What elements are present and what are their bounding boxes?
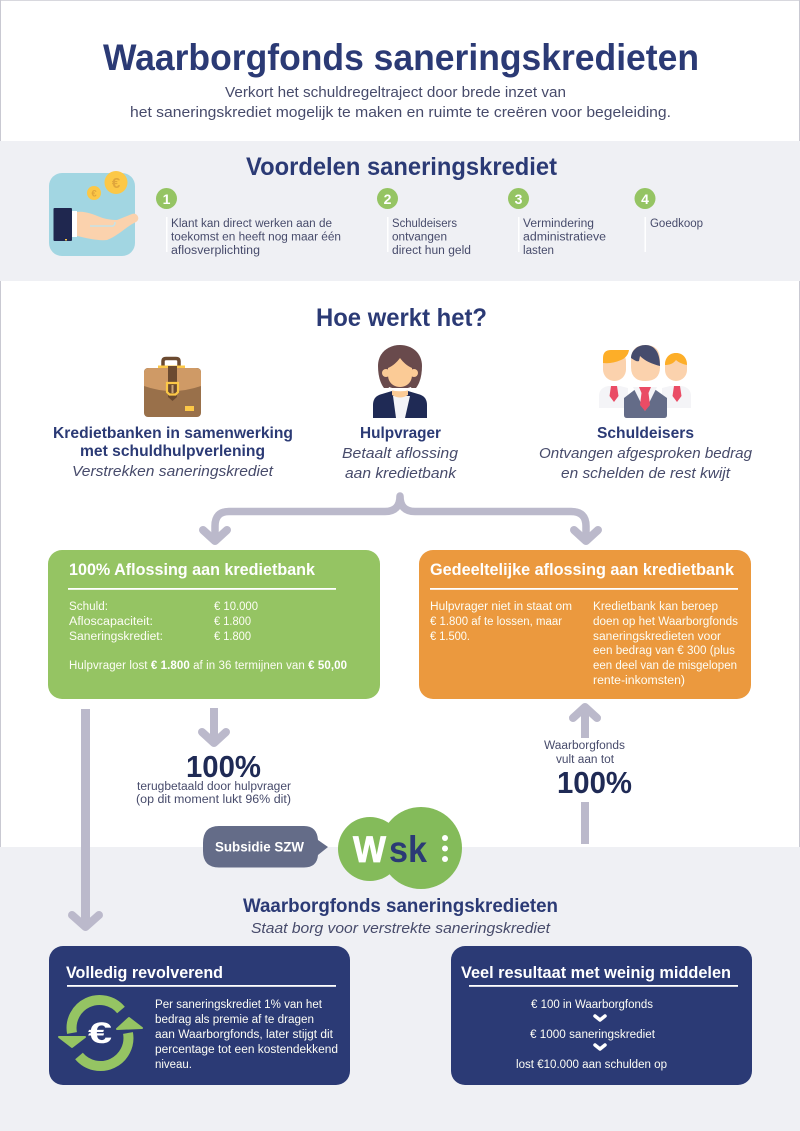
panel: gedeeltelijke aflossing: doen op het Waarborgfonds bbox=[593, 616, 738, 628]
item 1: toekomst en heeft nog maar één bbox=[171, 232, 341, 244]
panel: gedeeltelijke aflossing: saneringskredieten voor bbox=[593, 631, 721, 643]
panel: volledig revolverend: percentage tot een kostendekkend bbox=[155, 1044, 338, 1056]
title: Waarborgfonds saneringskredieten bbox=[103, 37, 699, 78]
logo: Wsk: W bbox=[353, 829, 386, 870]
block: hulpvrager: Betaalt aflossing bbox=[342, 445, 459, 462]
block: hulpvrager: Hulpvrager bbox=[360, 425, 441, 442]
icon: hand with coins: € bbox=[91, 188, 97, 200]
panel: voordelen saneringskrediet bbox=[49, 153, 703, 257]
panel: volledig revolverend: Volledig revolverend bbox=[66, 963, 223, 982]
block: kredietbanken: met schuldhulpverlening bbox=[80, 443, 265, 460]
panel: veel resultaat: € 1000 saneringskrediet bbox=[530, 1029, 656, 1041]
item 2: Schuldeisers bbox=[392, 218, 457, 230]
arrow: split from hulpvrager to both boxes bbox=[203, 496, 598, 541]
panel: 100% aflossing: € 1.800 bbox=[214, 616, 251, 628]
icon: chevron down bbox=[595, 1016, 605, 1020]
item 2 bbox=[377, 188, 471, 257]
panel: 100% aflossing: € 10.000 bbox=[214, 601, 258, 613]
subtitle bbox=[130, 84, 671, 121]
stat: 100% repaid: (op dit moment lukt 96% dit) bbox=[136, 794, 291, 806]
stat: 100% repaid: 100% bbox=[186, 749, 261, 784]
icon: euro cycle bbox=[59, 1000, 142, 1066]
panel: 100% aflossing: Saneringskrediet: bbox=[69, 631, 163, 643]
heading: hoe werkt het: Hoe werkt het? bbox=[316, 304, 487, 332]
arrow: up to gedeeltelijke aflossing bbox=[573, 707, 597, 844]
icon: chevron down second bbox=[595, 1045, 605, 1049]
panel: 100% aflossing bbox=[48, 550, 380, 699]
callout: subsidie SZW bbox=[203, 826, 328, 868]
icon: woman help seeker bbox=[373, 345, 427, 418]
block: schuldeisers: Ontvangen afgesproken bedrag bbox=[539, 445, 753, 462]
item 1: aflosverplichting bbox=[171, 245, 260, 257]
subtitle: Verkort het schuldregeltraject door brede inzet van bbox=[225, 84, 566, 101]
panel: veel resultaat bbox=[451, 946, 752, 1085]
item 1: 1 bbox=[163, 191, 171, 207]
panel: gedeeltelijke aflossing: rente-inkomsten) bbox=[593, 675, 685, 687]
block: schuldeisers: en schelden de rest kwijt bbox=[561, 465, 731, 482]
panel: 100% aflossing: 100% Aflossing aan kredietbank bbox=[69, 561, 316, 579]
item 3 bbox=[508, 188, 606, 257]
stat: waarborgfonds vult aan tot 100%: Waarborgfonds bbox=[544, 740, 625, 752]
panel: gedeeltelijke aflossing: Kredietbank kan beroep bbox=[593, 601, 718, 613]
arrow: down to 100% bbox=[202, 708, 226, 743]
heading: waarborgfonds saneringskredieten: Staat borg voor verstrekte saneringskrediet bbox=[251, 920, 551, 937]
panel: volledig revolverend: aan Waarborgfonds, later stijgt dit bbox=[155, 1029, 334, 1041]
panel: gedeeltelijke aflossing: € 1.800 af te lossen, maar bbox=[430, 616, 562, 628]
item 1: Klant kan direct werken aan de bbox=[171, 218, 332, 230]
item 3: administratieve bbox=[523, 232, 606, 244]
panel: gedeeltelijke aflossing: een deel van de misgelopen bbox=[593, 660, 737, 672]
item 2: ontvangen bbox=[392, 232, 447, 244]
item 4: Goedkoop bbox=[650, 218, 703, 230]
icon: hand with coins bbox=[49, 171, 138, 256]
logo: Wsk: sk bbox=[389, 829, 427, 870]
panel: volledig revolverend: Per saneringskrediet 1% van het bbox=[155, 999, 323, 1011]
item 1 bbox=[156, 188, 341, 257]
item 4 bbox=[634, 188, 703, 252]
panel: veel resultaat: Veel resultaat met weinig middelen bbox=[461, 963, 731, 982]
panel: veel resultaat: lost €10.000 aan schulden op bbox=[516, 1059, 667, 1071]
panel: 100% aflossing: Schuld: bbox=[69, 601, 108, 613]
icon: hand with coins: € bbox=[112, 175, 121, 192]
panel: gedeeltelijke aflossing: Hulpvrager niet in staat om bbox=[430, 601, 572, 613]
panel: 100% aflossing: Afloscapaciteit: bbox=[69, 616, 153, 628]
block: schuldeisers bbox=[539, 425, 753, 482]
heading: waarborgfonds saneringskredieten: Waarborgfonds saneringskredieten bbox=[243, 896, 558, 917]
block: hulpvrager bbox=[342, 425, 459, 482]
item 3: 3 bbox=[515, 191, 523, 207]
panel: gedeeltelijke aflossing bbox=[419, 550, 751, 699]
panel: 100% aflossing: Hulpvrager lost € 1.800 af in 36 termijnen van € 50,00 bbox=[69, 660, 347, 672]
panel: volledig revolverend bbox=[49, 946, 350, 1085]
panel: 100% aflossing: € 1.800 bbox=[214, 631, 251, 643]
stat: waarborgfonds vult aan tot 100% bbox=[544, 740, 632, 800]
icon: briefcase bbox=[144, 358, 201, 417]
panel: veel resultaat: € 100 in Waarborgfonds bbox=[531, 999, 653, 1011]
stat: waarborgfonds vult aan tot 100%: vult aan tot bbox=[556, 754, 615, 766]
arrow: left long to volledig revolverend bbox=[72, 709, 99, 927]
block: schuldeisers: Schuldeisers bbox=[597, 425, 694, 442]
panel: gedeeltelijke aflossing: een bedrag van € 300 (plus bbox=[593, 645, 735, 657]
logo: Wsk bbox=[338, 807, 462, 889]
subtitle: het saneringskrediet mogelijk te maken en ruimte te creëren voor begeleiding. bbox=[130, 104, 671, 121]
block: kredietbanken: Kredietbanken in samenwerking bbox=[53, 425, 293, 442]
stat: waarborgfonds vult aan tot 100%: 100% bbox=[557, 765, 632, 800]
panel: gedeeltelijke aflossing: Gedeeltelijke aflossing aan kredietbank bbox=[430, 561, 735, 579]
item 3: Vermindering bbox=[523, 218, 594, 230]
block: hulpvrager: aan kredietbank bbox=[345, 465, 458, 482]
icon: creditors group bbox=[599, 345, 691, 418]
item 4: 4 bbox=[641, 191, 649, 207]
panel: volledig revolverend: bedrag als premie af te dragen bbox=[155, 1014, 314, 1026]
heading: voordelen: Voordelen saneringskrediet bbox=[246, 153, 558, 181]
stat: 100% repaid bbox=[136, 749, 291, 806]
panel: volledig revolverend: niveau. bbox=[155, 1059, 192, 1071]
item 3: lasten bbox=[523, 245, 554, 257]
panel: gedeeltelijke aflossing: € 1.500. bbox=[430, 631, 470, 643]
heading: waarborgfonds saneringskredieten bbox=[243, 896, 558, 937]
icon: euro cycle: € bbox=[88, 1017, 112, 1050]
callout: subsidie SZW: Subsidie SZW bbox=[215, 840, 304, 854]
item 2: direct hun geld bbox=[392, 245, 471, 257]
block: kredietbanken bbox=[53, 425, 293, 480]
block: kredietbanken: Verstrekken saneringskrediet bbox=[72, 463, 274, 480]
stat: 100% repaid: terugbetaald door hulpvrager bbox=[137, 781, 291, 793]
item 2: 2 bbox=[384, 191, 392, 207]
